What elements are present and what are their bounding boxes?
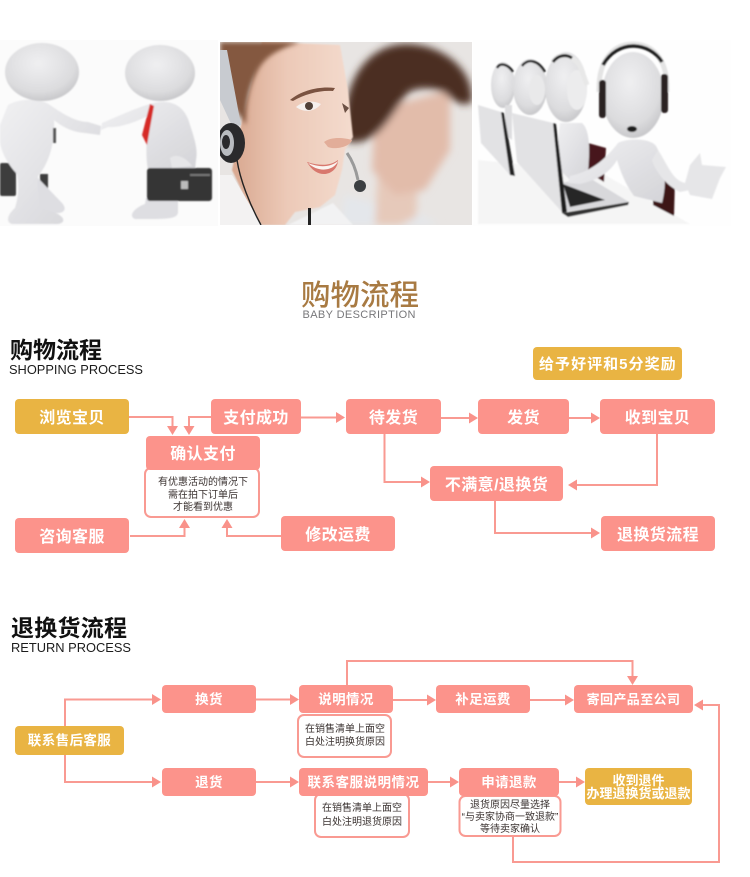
box: 说明情况: 说明情况 <box>318 691 374 707</box>
arrow: 退货 to 联系客服说明情况 <box>256 776 299 788</box>
arrow: 收到宝贝 to 不满意 <box>568 434 657 490</box>
box: 收到宝贝 <box>600 399 715 434</box>
note: 退款原因: “与卖家协商一致退款” <box>462 810 558 823</box>
arrow: 申请退款 back to 寄回产品至公司 <box>513 700 719 862</box>
box: 申请退款 <box>459 768 559 796</box>
heading: return process: RETURN PROCESS <box>11 640 131 655</box>
box: 补足运费 <box>436 685 530 713</box>
note: 退货原因: 白处注明退货原因 <box>322 815 402 828</box>
box: 换货: 换货 <box>195 691 223 707</box>
box: 咨询客服: 咨询客服 <box>39 527 105 546</box>
box: 联系售后客服 <box>15 726 124 755</box>
heading: shopping process <box>9 337 143 377</box>
arrow: 浏览宝贝 to 确认支付 <box>129 417 178 435</box>
note: 退货原因 <box>315 794 409 837</box>
arrow: 说明情况 to 补足运费 <box>393 694 436 706</box>
arrow: 待发货 to 发货 <box>441 412 478 424</box>
box: 补足运费: 补足运费 <box>455 691 511 707</box>
heading: shopping process: 购物流程 <box>10 337 102 363</box>
box: 退货 <box>162 768 256 796</box>
box: 说明情况 <box>299 685 393 713</box>
arrow: 发货 to 收到宝贝 <box>569 412 600 424</box>
arrow: 换货 to 说明情况 <box>256 694 299 705</box>
photo: 3D figures with headsets at laptops <box>473 40 731 226</box>
box: 咨询客服 <box>15 518 129 553</box>
box: 收到宝贝: 收到宝贝 <box>625 408 690 427</box>
box: 确认支付 <box>146 436 260 470</box>
box: 寄回产品至公司 <box>574 685 693 713</box>
note: 退款原因: 退货原因尽量选择 <box>470 798 550 811</box>
box: 发货: 发货 <box>507 408 540 427</box>
arrow: 联系客服说明情况 to 申请退款 <box>428 776 459 788</box>
photo: 3D figures shaking hands <box>0 40 218 226</box>
arrow: 申请退款 to 收到退件 <box>559 776 585 788</box>
callout: 给予好评和5分奖励: 给予好评和5分奖励 <box>539 355 676 373</box>
box: 待发货 <box>346 399 441 434</box>
note: 换货原因 <box>298 715 391 757</box>
box: 浏览宝贝: 浏览宝贝 <box>39 408 105 427</box>
arrow: 修改运费 to 确认支付 <box>222 519 281 536</box>
heading: return process <box>11 615 131 655</box>
box: 联系客服说明情况: 联系客服说明情况 <box>308 774 420 790</box>
arrow: 支付成功 to 确认支付 <box>184 417 211 435</box>
heading: return process: 退换货流程 <box>11 615 127 641</box>
note: 退货原因: 在销售清单上面空 <box>322 801 402 814</box>
box: 修改运费: 修改运费 <box>305 526 371 544</box>
box: 退换货流程: 退换货流程 <box>617 525 699 544</box>
note: 优惠活动说明 <box>145 468 259 517</box>
box: 申请退款: 申请退款 <box>481 774 537 790</box>
box: 发货 <box>478 399 569 434</box>
arrow: 联系售后客服 to 退货 <box>65 755 161 788</box>
box: 确认支付: 确认支付 <box>170 444 236 463</box>
box: 浏览宝贝 <box>15 399 129 434</box>
note: 退款原因 <box>460 796 560 836</box>
note: 换货原因: 在销售清单上面空 <box>305 722 385 735</box>
box: 换货 <box>162 685 256 713</box>
note: 优惠活动说明: 才能看到优惠 <box>173 500 233 513</box>
box: 退货: 退货 <box>195 774 223 790</box>
arrow: 待发货 to 不满意 <box>384 434 430 488</box>
box: 不满意/退换货 <box>430 466 563 501</box>
box: 收到退件 办理退换货或退款: 收到退件 <box>612 773 665 788</box>
box: 不满意/退换货: 不满意/退换货 <box>445 475 548 494</box>
arrow: 补足运费 to 寄回产品至公司 <box>530 694 574 706</box>
arrow: 不满意 to 退换货流程 <box>495 501 600 538</box>
note: 退款原因: 等待卖家确认 <box>480 822 540 835</box>
note: 换货原因: 白处注明换货原因 <box>305 735 385 748</box>
arrow: 支付成功 to 待发货 <box>301 412 345 423</box>
section title: 购物流程: BABY DESCRIPTION <box>302 309 416 321</box>
note: 优惠活动说明: 需在拍下订单后 <box>168 488 238 501</box>
heading: shopping process: SHOPPING PROCESS <box>9 362 143 377</box>
box: 退换货流程 <box>601 516 715 551</box>
box: 寄回产品至公司: 寄回产品至公司 <box>587 692 680 707</box>
arrow: 咨询客服 to 确认支付 <box>130 519 190 536</box>
box: 收到退件 办理退换货或退款 <box>585 768 692 805</box>
box: 联系客服说明情况 <box>299 768 428 796</box>
photo: call center agents <box>217 42 472 225</box>
box: 支付成功: 支付成功 <box>223 408 289 427</box>
arrow: 说明情况 to 寄回产品至公司 <box>347 661 638 685</box>
box: 联系售后客服: 联系售后客服 <box>28 732 111 748</box>
box: 待发货: 待发货 <box>369 408 418 427</box>
box: 收到退件 办理退换货或退款: 办理退换货或退款 <box>586 786 691 801</box>
arrow: 联系售后客服 to 换货 <box>65 694 161 726</box>
box: 支付成功 <box>211 399 301 434</box>
callout: 给予好评和5分奖励 <box>533 347 682 380</box>
note: 优惠活动说明: 有优惠活动的情况下 <box>158 475 248 488</box>
section title: 购物流程: 购物流程 <box>301 279 419 312</box>
box: 修改运费 <box>281 516 395 551</box>
